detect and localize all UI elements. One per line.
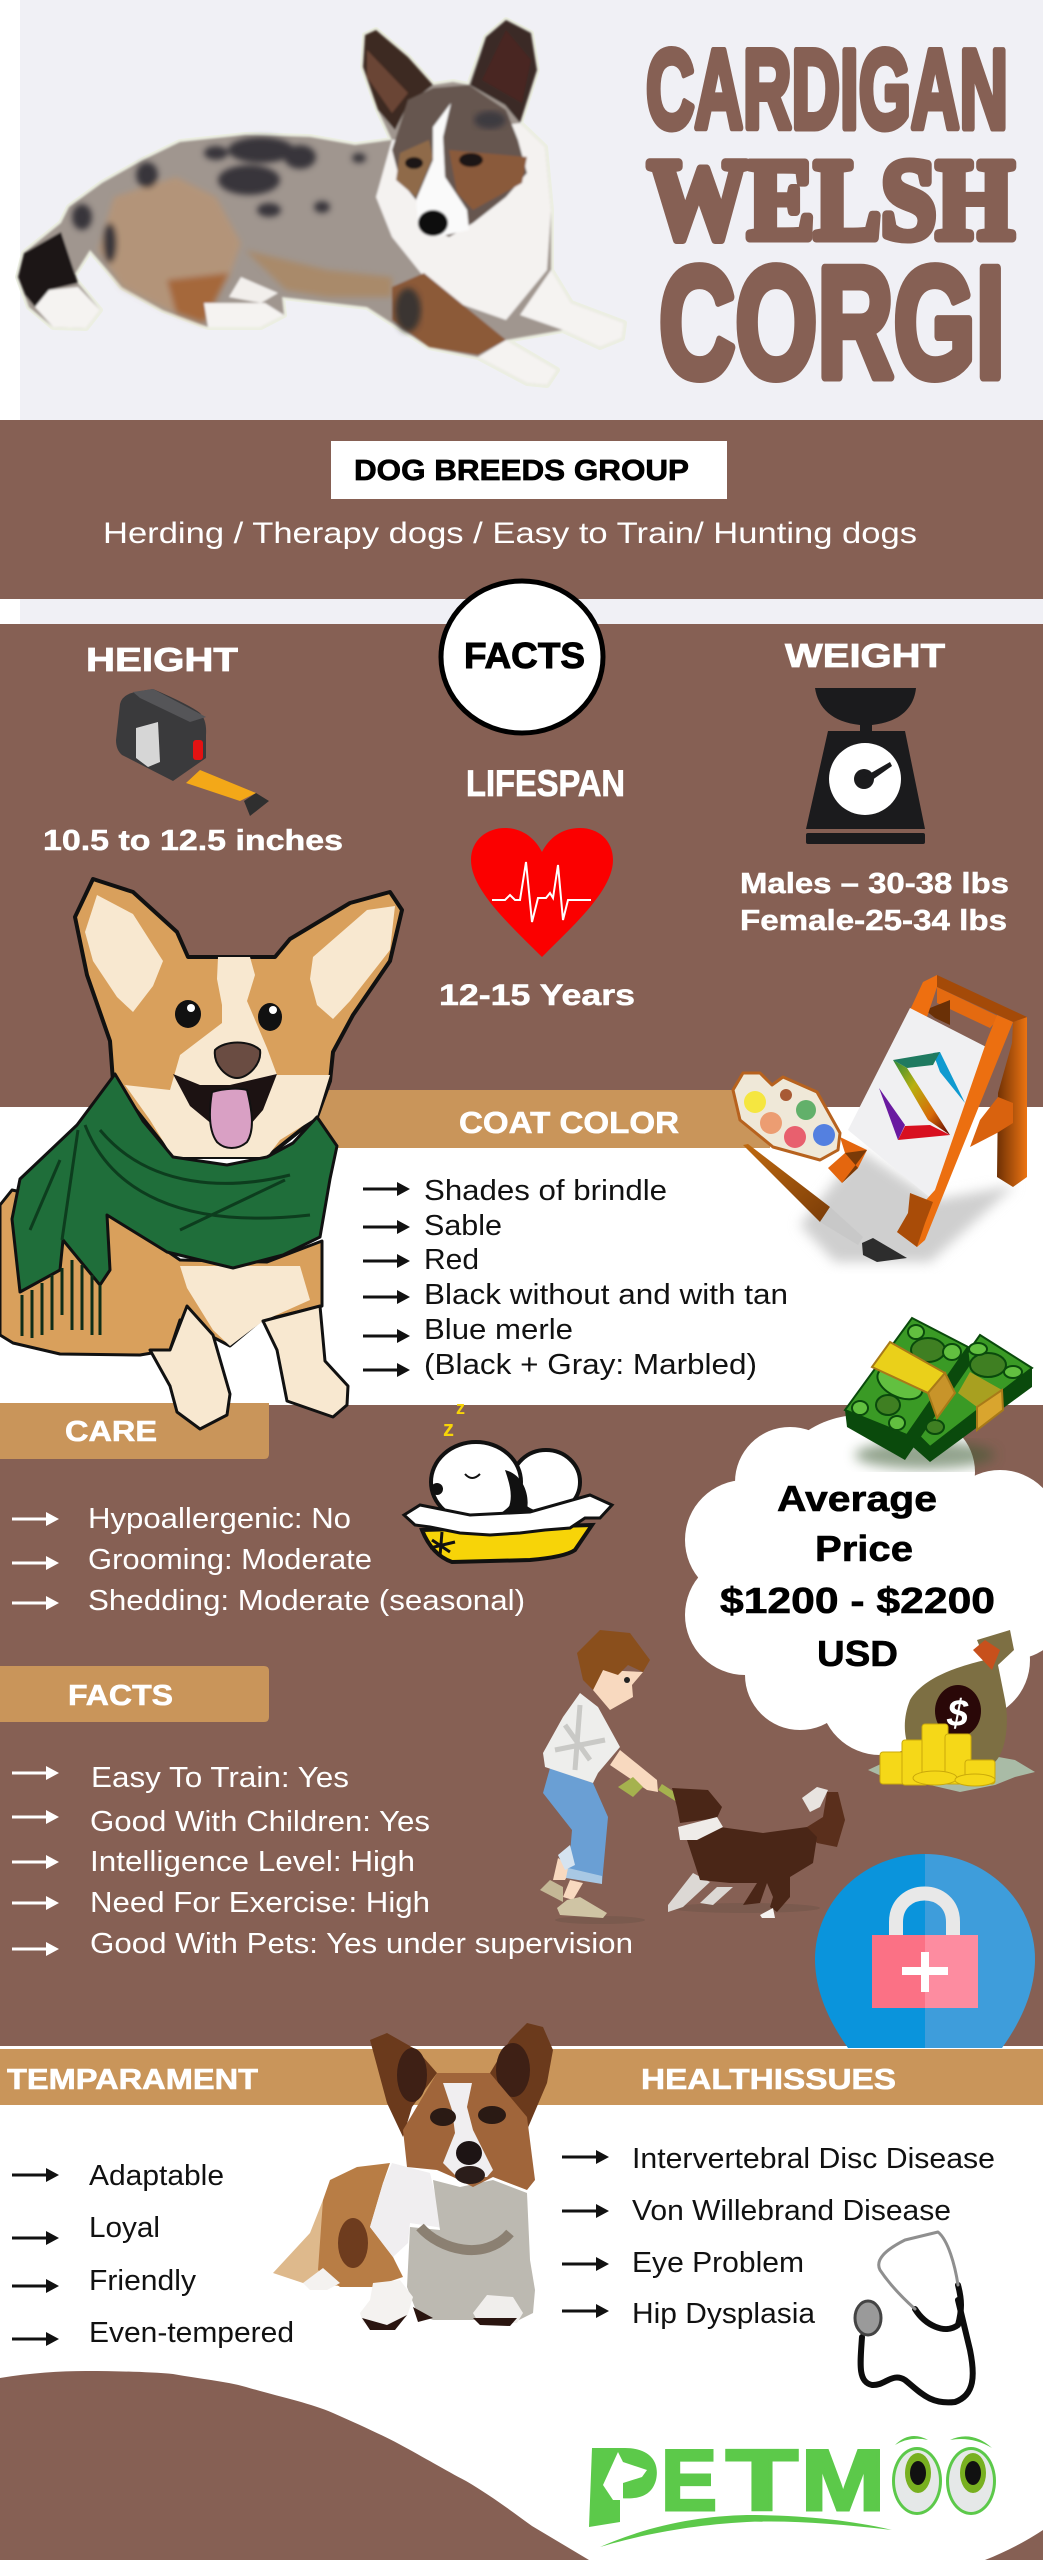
price cloud: [685, 1415, 1043, 1755]
icon: sleeping dog in basket: z: [443, 1416, 454, 1441]
panel: care and facts background: [0, 1405, 1043, 2046]
block: weight: Males – 30-38 lbs: [740, 868, 1009, 900]
list: facts: Need For Exercise: High: [90, 1887, 430, 1919]
price cloud: $1200 - $2200: [720, 1580, 995, 1621]
list: temperament: [12, 2160, 294, 2349]
list: coat colors: Sable: [424, 1210, 502, 1242]
list: care: Hypoallergenic: No: [88, 1503, 351, 1535]
icon: medical lock circle: [815, 1854, 1035, 2048]
banner: temperament and health issues: [0, 2049, 1043, 2105]
dog: [668, 1787, 845, 1918]
list: health issues: Hip Dysplasia: [632, 2298, 816, 2330]
banner: coat color: COAT COLOR: [459, 1105, 679, 1140]
text: breed groups: Herding / Therapy dogs / Easy to Train/ Hunting dogs: [103, 517, 917, 550]
illustration: boy playing tug with dog: [540, 1630, 845, 1924]
logo: Petmoo: [589, 2433, 996, 2547]
banner: care: CARE: [65, 1416, 157, 1448]
block: height: [43, 641, 343, 857]
icon: stethoscope: [855, 2232, 973, 2402]
list: facts: Easy To Train: Yes: [91, 1762, 349, 1794]
icon: palette: [733, 1073, 840, 1160]
logo: Petmoo: T: [726, 2433, 798, 2529]
list: facts: [12, 1762, 633, 1960]
list: temperament: Even-tempered: [89, 2317, 294, 2349]
icon: heart with heartbeat: [471, 828, 613, 957]
block: height: 10.5 to 12.5 inches: [43, 825, 343, 857]
list: care: Shedding: Moderate (seasonal): [88, 1585, 525, 1617]
list: facts: Good With Pets: Yes under supervision: [90, 1928, 633, 1960]
list: care: [12, 1503, 525, 1617]
list: coat colors: [363, 1175, 788, 1381]
scarf: [12, 1074, 337, 1338]
list: coat colors: (Black + Gray: Marbled): [424, 1349, 757, 1381]
block: height: HEIGHT: [86, 641, 238, 678]
facts circle: [441, 581, 603, 733]
list: temperament: Adaptable: [89, 2160, 224, 2192]
list: health issues: Von Willebrand Disease: [632, 2195, 951, 2227]
icon: tape measure: [116, 689, 269, 816]
list: health issues: [562, 2143, 995, 2330]
logo: Petmoo: M: [801, 2433, 885, 2529]
list: coat colors: Black without and with tan: [424, 1279, 788, 1311]
icon: easel with palette and brush: [733, 975, 1027, 1262]
list: temperament: Loyal: [89, 2212, 160, 2244]
banner: facts: [0, 1666, 269, 1722]
boy: [540, 1630, 685, 1918]
title: Cardigan Welsh Corgi: [646, 27, 1014, 411]
icon: stack of cash: [845, 1318, 1032, 1469]
illustration: cartoon corgi with green scarf: [0, 879, 402, 1429]
banner: coat color: [300, 1090, 770, 1148]
list: health issues: Intervertebral Disc Disease: [632, 2143, 995, 2175]
logo eyes: [892, 2436, 996, 2515]
heading: dog breeds group: DOG BREEDS GROUP: [354, 455, 689, 487]
block: lifespan: 12-15 Years: [439, 979, 635, 1012]
icon: sleeping dog in basket: [404, 1398, 612, 1562]
panel: coat colour white background: [0, 1107, 1043, 1403]
price cloud: USD: [817, 1633, 898, 1674]
block: weight: Female-25-34 lbs: [740, 905, 1007, 937]
block: weight: WEIGHT: [785, 637, 945, 674]
panel: dog breeds group: [0, 420, 1043, 599]
facts circle: FACTS: [464, 635, 585, 676]
photo: merle corgi lying down: [18, 20, 624, 385]
icon: money bag and coins: [868, 1630, 1035, 1792]
heading: temperament: TEMPARAMENT: [7, 2064, 258, 2096]
decorative bottom swoosh: [0, 2371, 1043, 2560]
block: lifespan: LIFESPAN: [466, 763, 625, 804]
panel: header background: [20, 0, 1043, 624]
price cloud: Price: [815, 1528, 913, 1569]
list: temperament: Friendly: [89, 2265, 197, 2297]
banner: care: [0, 1403, 269, 1459]
icon: sleeping dog in basket: z: [456, 1398, 465, 1418]
list: facts: Good With Children: Yes: [90, 1806, 430, 1838]
heading: health issues: HEALTHISSUES: [641, 2064, 896, 2096]
icon: kitchen scale: [806, 688, 925, 844]
list: care: Grooming: Moderate: [88, 1544, 372, 1576]
banner: facts: FACTS: [68, 1680, 173, 1712]
panel: facts background: [0, 624, 1043, 1107]
list: health issues: Eye Problem: [632, 2247, 804, 2279]
icon: paint brush: [743, 1144, 907, 1262]
icon: money bag and coins: $: [946, 1693, 969, 1735]
list: coat colors: Shades of brindle: [424, 1175, 667, 1207]
list: coat colors: Blue merle: [424, 1314, 573, 1346]
list: coat colors: Red: [424, 1244, 479, 1276]
illustration: sitting corgi: [273, 2023, 553, 2330]
list: facts: Intelligence Level: High: [90, 1846, 415, 1878]
price cloud: Average: [777, 1478, 937, 1519]
block: lifespan: [439, 763, 635, 1012]
logo: Petmoo: E: [661, 2433, 717, 2529]
block: weight: [740, 637, 1009, 937]
